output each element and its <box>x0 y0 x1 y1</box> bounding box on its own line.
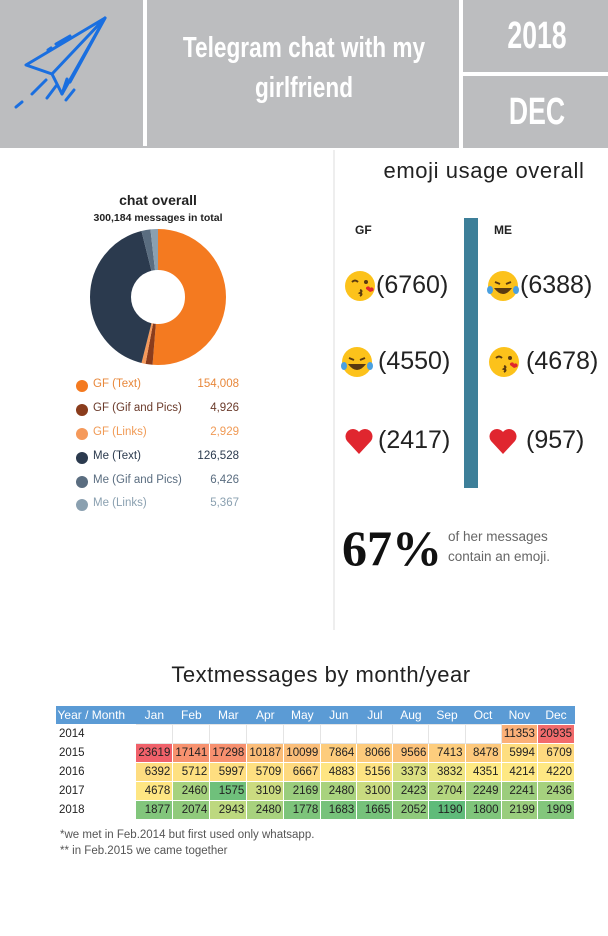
label GF: GF <box>355 223 372 237</box>
heatmap table: 2480 <box>256 804 281 816</box>
legend: 5,367 <box>210 497 239 509</box>
heatmap table: 3109 <box>256 784 281 796</box>
legend: 4,926 <box>210 402 239 414</box>
heatmap table: Sep <box>436 708 458 722</box>
heatmap table: 1877 <box>145 804 170 816</box>
heatmap table: 5997 <box>219 766 244 778</box>
GF row 3: heart 2417 <box>346 426 450 454</box>
month: DEC <box>509 91 565 133</box>
ME row 2: kiss 4678 <box>489 347 598 377</box>
heatmap table: 3100 <box>365 784 390 796</box>
heatmap table: 2017 <box>59 784 85 796</box>
heatmap table: 1683 <box>329 804 354 816</box>
heatmap table: 6709 <box>546 746 572 758</box>
heatmap table: 1909 <box>546 804 572 816</box>
heatmap table: 7864 <box>329 746 354 758</box>
chart subtitle: 300,184 messages in total <box>94 212 222 224</box>
heatmap table: 7413 <box>437 746 463 758</box>
ME row 3: heart 957: (957) <box>526 426 584 454</box>
heatmap table: 2018 <box>59 804 85 816</box>
stat caption <box>448 529 550 564</box>
heatmap table: 2052 <box>401 804 426 816</box>
heatmap table: Year / Month <box>58 708 125 722</box>
heatmap table: 2016 <box>59 766 85 778</box>
footnotes: ** in Feb.2015 we came together <box>60 845 228 857</box>
heatmap table: 5712 <box>182 766 207 778</box>
stat caption: of her messages <box>448 529 548 544</box>
legend: Me (Gif and Pics) <box>93 474 182 486</box>
GF row 1: kiss 6760: (6760) <box>376 271 448 299</box>
heatmap table: 2241 <box>509 784 535 796</box>
heatmap table: May <box>291 708 314 722</box>
heatmap table: Oct <box>474 708 492 722</box>
stat: 67%: 67% <box>342 520 442 576</box>
heatmap table: 2249 <box>473 784 499 796</box>
GF row 2: laugh 4550: (4550) <box>378 347 450 375</box>
heatmap table: 5994 <box>509 746 535 758</box>
legend: 154,008 <box>197 378 239 390</box>
heatmap table: Jan <box>145 708 164 722</box>
teal divider bar <box>464 218 478 488</box>
heatmap table: 5709 <box>256 766 281 778</box>
heatmap table: Dec <box>545 708 567 722</box>
heatmap table: 2460 <box>182 784 207 796</box>
chart title: chat overall <box>119 192 197 208</box>
heatmap table: 2199 <box>509 804 535 816</box>
heatmap table: 2015 <box>59 746 85 758</box>
title: girlfriend <box>255 72 353 104</box>
label ME: ME <box>494 223 512 237</box>
heatmap table: 6667 <box>293 766 318 778</box>
ME row 1: laugh 6388: (6388) <box>520 271 592 299</box>
GF row 1: kiss 6760 <box>345 271 448 301</box>
legend: Me (Text) <box>93 450 141 462</box>
ME row 1: laugh 6388 <box>487 271 592 301</box>
heatmap table: 17298 <box>212 746 244 758</box>
heatmap table: 8066 <box>365 746 390 758</box>
heatmap table: Apr <box>256 708 275 722</box>
heatmap table: 17141 <box>175 746 207 758</box>
heatmap table: 1778 <box>293 804 318 816</box>
GF row 3: heart 2417: (2417) <box>378 426 450 454</box>
stat caption: contain an emoji. <box>448 549 550 564</box>
heatmap table: Jun <box>329 708 348 722</box>
heatmap table: 10099 <box>286 746 318 758</box>
header band <box>0 0 608 148</box>
heatmap table: 3832 <box>437 766 463 778</box>
heatmap table: 4678 <box>145 784 170 796</box>
footnotes <box>60 829 314 857</box>
ME row 3: heart 957 <box>490 426 584 454</box>
heatmap table: Aug <box>400 708 422 722</box>
heatmap table: Nov <box>509 708 530 722</box>
heatmap table: 6392 <box>145 766 170 778</box>
heatmap table: 11353 <box>504 728 535 740</box>
title <box>183 32 425 104</box>
heading: emoji usage overall: emoji usage overall <box>384 158 584 183</box>
legend: 126,528 <box>197 450 239 462</box>
heading: Textmessages by month/year: Textmessages by month/year <box>171 662 471 687</box>
heatmap table: 8478 <box>473 746 499 758</box>
footnotes: *we met in Feb.2014 but first used only whatsapp. <box>60 829 314 841</box>
heatmap table: 2074 <box>182 804 207 816</box>
legend: GF (Gif and Pics) <box>93 402 182 414</box>
heatmap table: 3373 <box>401 766 426 778</box>
heatmap table: 4220 <box>546 766 572 778</box>
icon: paper plane <box>14 16 107 109</box>
legend: 2,929 <box>210 426 239 438</box>
legend: Me (Links) <box>93 497 147 509</box>
heatmap table: 1665 <box>365 804 390 816</box>
heatmap table: Mar <box>218 708 239 722</box>
heatmap table: 1190 <box>438 804 463 816</box>
year: 2018 <box>507 15 567 57</box>
heatmap table: 2480 <box>329 784 354 796</box>
legend: GF (Text) <box>93 378 141 390</box>
heatmap table: 20935 <box>540 728 572 740</box>
heatmap table: 9566 <box>401 746 426 758</box>
heatmap table: 2014 <box>59 728 85 740</box>
heatmap table: 1800 <box>473 804 499 816</box>
heatmap table: 1575 <box>219 784 244 796</box>
heatmap table: 5156 <box>365 766 390 778</box>
title: Telegram chat with my <box>183 32 425 64</box>
heatmap table: Feb <box>181 708 202 722</box>
heatmap table: 4214 <box>509 766 535 778</box>
heatmap table: 4883 <box>329 766 354 778</box>
heatmap table: Jul <box>367 708 383 722</box>
heatmap table: 23619 <box>138 746 170 758</box>
heatmap table: 2169 <box>293 784 318 796</box>
heatmap table <box>56 706 575 819</box>
heatmap table: 10187 <box>249 746 281 758</box>
donut chart <box>90 229 226 365</box>
panel: chat overall <box>94 192 222 224</box>
heatmap table: 2436 <box>546 784 572 796</box>
legend: 6,426 <box>210 474 239 486</box>
GF row 2: laugh 4550 <box>341 347 450 377</box>
heatmap table: 4351 <box>473 766 499 778</box>
ME row 2: kiss 4678: (4678) <box>526 347 598 375</box>
legend: GF (Links) <box>93 426 147 438</box>
legend <box>76 378 239 511</box>
heatmap table: 2943 <box>219 804 244 816</box>
heatmap table: 2704 <box>437 784 463 796</box>
heatmap table: 2423 <box>401 784 426 796</box>
